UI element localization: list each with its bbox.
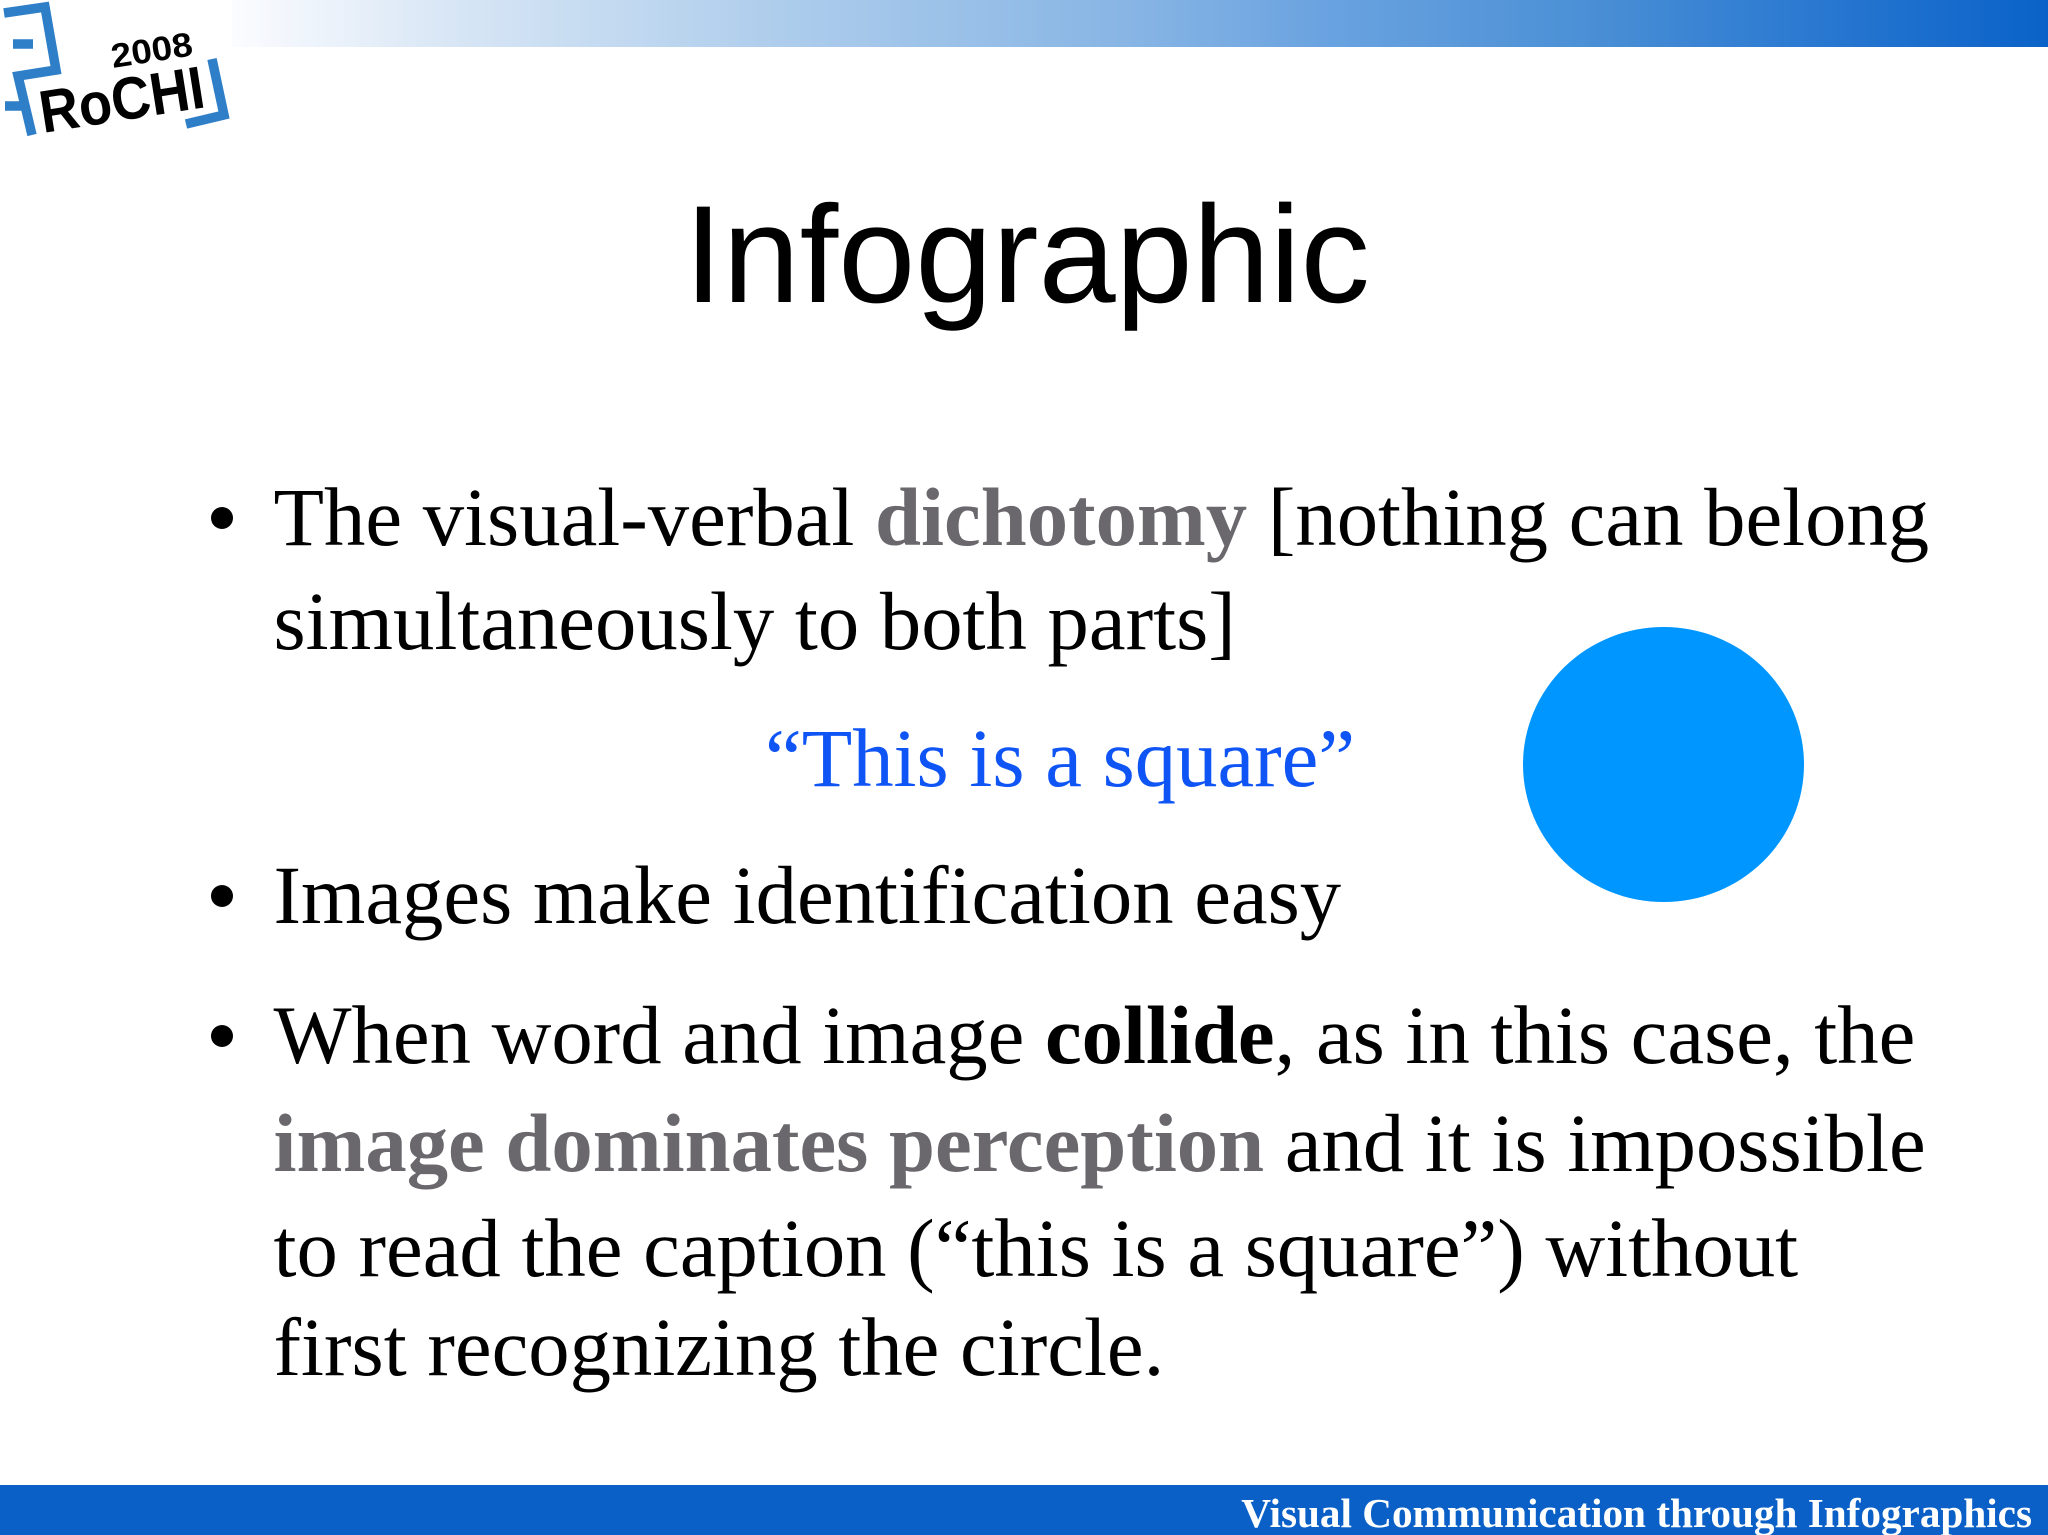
footer text: Visual Communication through Infographics [1241, 1490, 2032, 1535]
bullet: word and image collide [211, 988, 1926, 1392]
title: Infographic [684, 178, 1370, 332]
text: Images make identification easy [274, 848, 1341, 940]
bullet: images make identification easy [211, 848, 1341, 940]
text: simultaneously to both parts] [274, 574, 1236, 666]
text: The visual-verbal dichotomy [nothing can belong [274, 470, 1929, 562]
footer bar [0, 1485, 2048, 1535]
text: image dominates perception and it is impossible [274, 1096, 1926, 1188]
text: first recognizing the circle. [274, 1300, 1164, 1392]
blue circle [1523, 627, 1804, 902]
text: to read the caption (“this is a square”) without [274, 1202, 1798, 1294]
caption: this is a square: “This is a square” [765, 712, 1355, 804]
logo: RoCHI 2008: 2008 [108, 26, 195, 76]
logo: RoCHI 2008 [3, 2, 230, 140]
bullet list: visual-verbal dichotomy [211, 470, 1929, 666]
header gradient band [232, 0, 2048, 47]
text: When word and image collide, as in this case, the [274, 988, 1915, 1080]
